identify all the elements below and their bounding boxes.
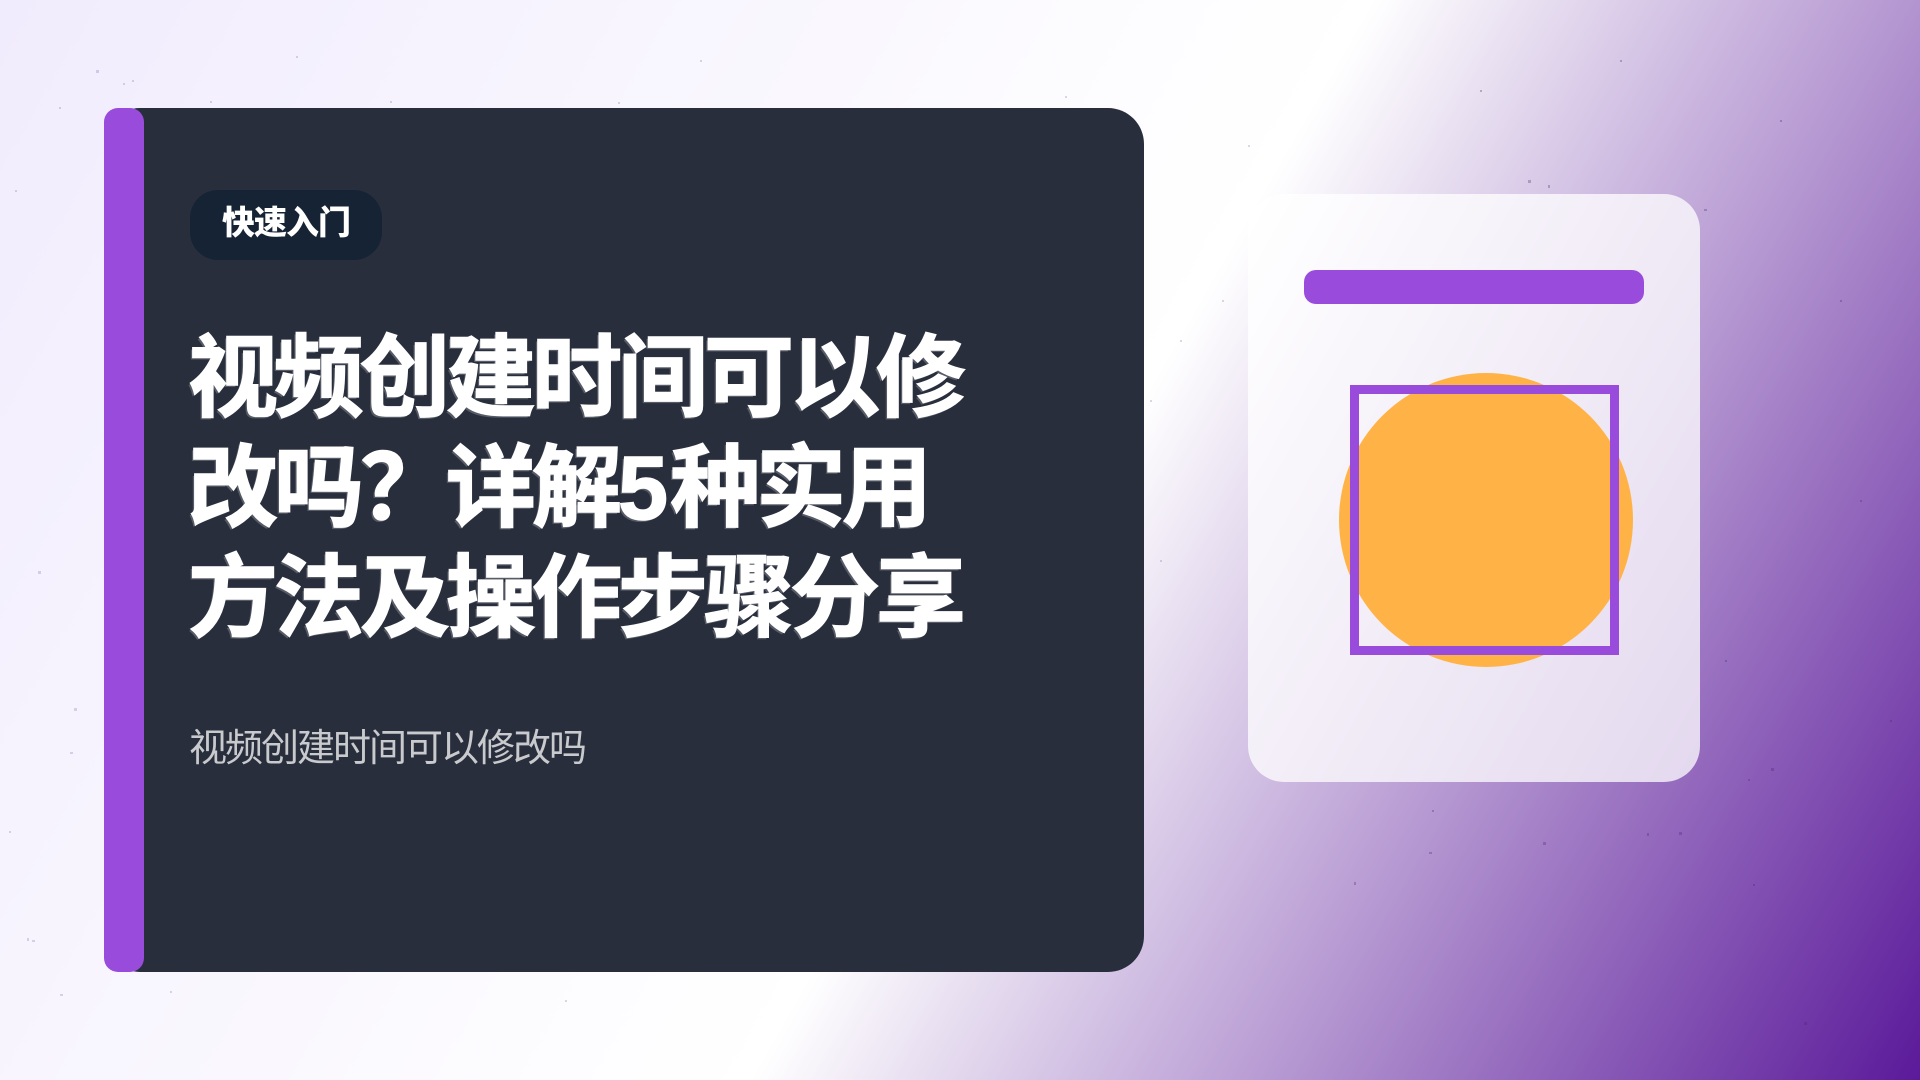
subtitle: 视频创建时间可以修改吗 bbox=[189, 728, 585, 770]
tag pill: 快速入门 bbox=[190, 190, 382, 260]
panel: dark title card bbox=[104, 108, 1144, 972]
title: 改吗？详解5种实用 bbox=[188, 439, 928, 539]
icon: orange circle bbox=[1339, 373, 1633, 667]
panel: illustration card bbox=[1248, 194, 1700, 782]
title: 视频创建时间可以修 bbox=[188, 329, 962, 429]
tag pill: 快速入门: 快速入门 bbox=[222, 204, 350, 241]
illustration header bar bbox=[1304, 270, 1644, 304]
icon: purple square outline bbox=[1350, 385, 1619, 654]
title: 方法及操作步骤分享 bbox=[188, 549, 962, 649]
title bbox=[188, 329, 966, 649]
accent bar bbox=[104, 108, 144, 972]
